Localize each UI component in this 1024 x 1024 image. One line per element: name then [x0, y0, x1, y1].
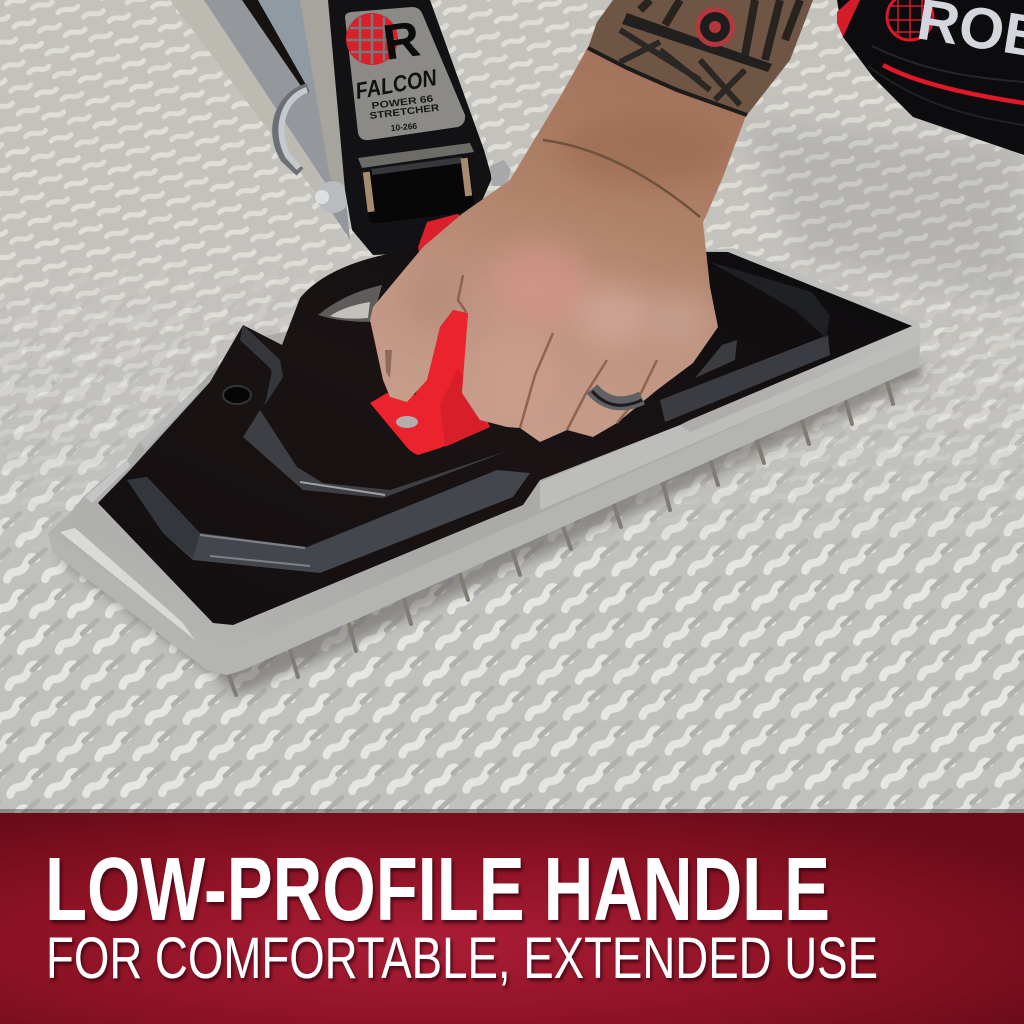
black top plate: [98, 250, 912, 625]
stretcher tube and ring: [170, 0, 350, 240]
right raised ridge: [660, 335, 830, 422]
soft shadow under tool: [60, 350, 930, 695]
raised ridge, upper: [240, 325, 510, 498]
nameplate: FALCON: [353, 64, 439, 104]
raised ridge, lower: [127, 470, 530, 573]
red handle: [370, 310, 490, 455]
tattoo band: [588, 0, 813, 115]
aluminium base plate: [48, 248, 921, 675]
red lever behind hand: [418, 214, 470, 258]
nameplate: [345, 7, 465, 140]
thumbnail: [385, 350, 392, 378]
stretcher head bracket with nameplate: [328, 0, 511, 255]
carpet background: [0, 0, 1024, 815]
ring: [592, 389, 642, 403]
carpet pins: [229, 382, 893, 695]
red banner: [0, 809, 1024, 1024]
nameplate: R: [380, 10, 423, 71]
knee pad, top right: [837, 0, 1024, 155]
nameplate: 10-266: [390, 121, 418, 133]
nameplate: POWER 66: [371, 94, 434, 112]
finger creases: [458, 275, 657, 430]
screw hole: [223, 386, 251, 404]
nameplate: STRETCHER: [369, 103, 440, 122]
arm and hand: [370, 47, 747, 442]
hinge: [358, 143, 474, 168]
handle arch opening: [318, 285, 382, 322]
